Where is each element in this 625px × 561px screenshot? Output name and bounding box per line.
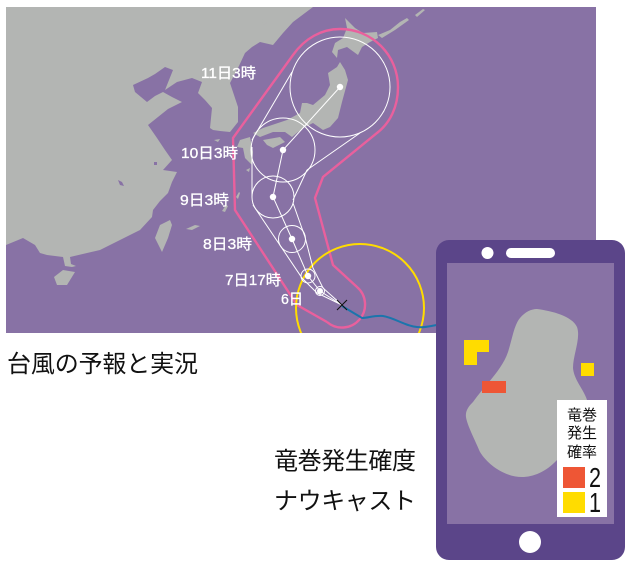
legend title xyxy=(567,407,597,461)
forecast time labels xyxy=(180,65,303,308)
legend swatch level 2 xyxy=(563,467,585,488)
storm wind area circle xyxy=(295,243,425,333)
forecast time labels: 7日17時 xyxy=(225,272,281,289)
heading: tornado nowcast: 竜巻発生確度 xyxy=(274,448,416,475)
icon: phone home button xyxy=(519,531,541,553)
legend label 1: 1 xyxy=(589,487,601,518)
legend box xyxy=(557,400,607,517)
panel: smartphone xyxy=(436,240,625,560)
legend: tornado probability xyxy=(557,400,607,518)
legend title: 竜巻 xyxy=(567,407,597,424)
legend title: 発生 xyxy=(567,425,597,442)
legend swatch level 1 xyxy=(563,492,585,513)
past track line xyxy=(342,306,437,327)
heading: tornado nowcast xyxy=(274,448,416,515)
forecast time labels: 9日3時 xyxy=(180,192,229,209)
forecast warning area outline xyxy=(233,29,398,328)
legend title: 確率 xyxy=(567,444,597,461)
phone screen xyxy=(447,263,614,524)
heading: tornado nowcast: ナウキャスト xyxy=(274,488,416,515)
forecast time labels: 8日3時 xyxy=(203,236,252,253)
tornado probability cells level 2 xyxy=(482,381,506,393)
phone body xyxy=(436,240,625,560)
forecast time labels: 11日3時 xyxy=(201,65,256,82)
map sea background xyxy=(6,7,596,333)
forecast time labels: 10日3時 xyxy=(181,145,238,162)
land: East Asia landmasses xyxy=(6,7,425,285)
heading: typhoon forecast and actual: 台風の予報と実況 xyxy=(7,351,198,378)
tornado probability cells level 1 xyxy=(464,340,594,376)
forecast centre points xyxy=(270,84,343,294)
island shape xyxy=(466,309,587,477)
forecast time labels: 6日 xyxy=(281,291,303,308)
panel: typhoon forecast map xyxy=(6,7,596,333)
icon: phone speaker xyxy=(506,248,555,258)
forecast circles and envelope xyxy=(251,37,390,305)
icon: phone camera xyxy=(482,247,494,259)
legend label 2: 2 xyxy=(589,462,601,493)
icon: typhoon centre cross xyxy=(337,300,347,310)
